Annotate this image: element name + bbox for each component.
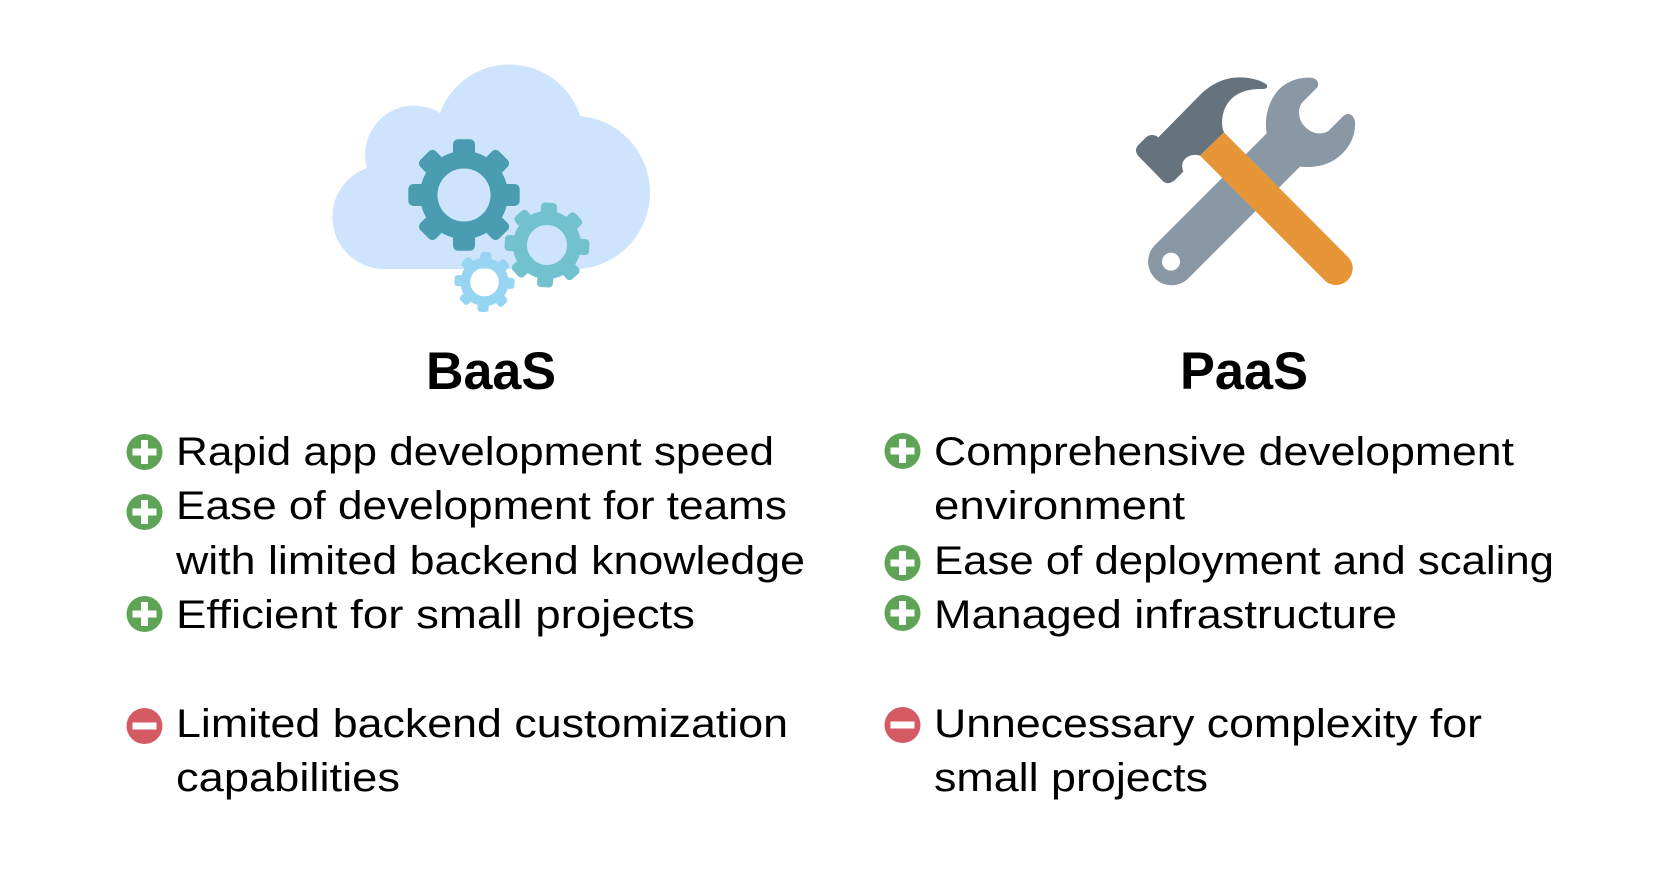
icon: hammer and wrench xyxy=(1136,77,1355,285)
pro: comprehensive development environment: Comprehensive development xyxy=(934,430,1514,474)
pro: rapid app development speed: Rapid app development speed xyxy=(176,430,774,474)
icon: cloud with gears xyxy=(332,64,650,314)
heading: PaaS: PaaS xyxy=(1180,342,1308,401)
pro: managed infrastructure: Managed infrastructure xyxy=(934,593,1397,637)
pro: ease of development: with limited backend knowledge xyxy=(175,539,805,583)
pro: comprehensive development environment: environment xyxy=(934,484,1185,528)
con: unnecessary complexity: small projects xyxy=(934,756,1208,800)
pro: ease of development xyxy=(126,484,805,583)
pro: ease of deployment and scaling: Ease of deployment and scaling xyxy=(934,539,1554,583)
panel: PaaS xyxy=(884,77,1554,800)
heading: BaaS: BaaS xyxy=(426,342,556,401)
panel: BaaS xyxy=(126,64,805,800)
con: unnecessary complexity xyxy=(884,702,1482,800)
con: limited backend customization xyxy=(126,702,788,800)
pro: comprehensive development environment xyxy=(884,430,1514,528)
pro: efficient for small projects: Efficient for small projects xyxy=(176,593,695,637)
pro: ease of development: Ease of development for teams xyxy=(176,484,787,528)
con: unnecessary complexity: Unnecessary complexity for xyxy=(934,702,1482,746)
con: limited backend customization: capabilities xyxy=(176,756,400,800)
con: limited backend customization: Limited backend customization xyxy=(176,702,788,746)
